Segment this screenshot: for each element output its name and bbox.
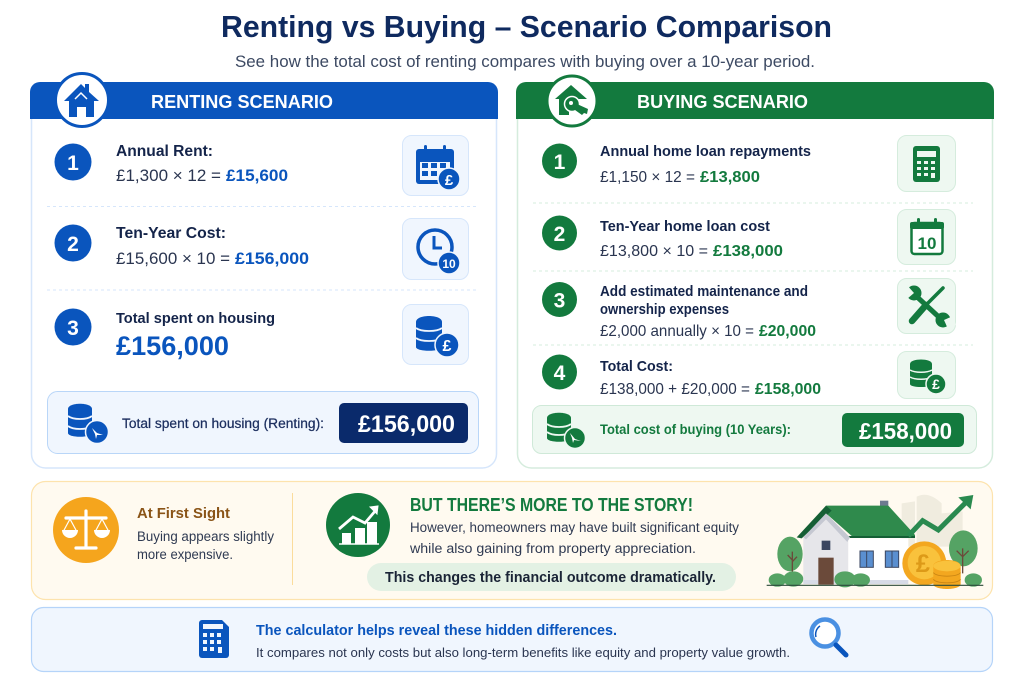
icon: coins with pound	[402, 304, 468, 364]
buying total value	[842, 413, 964, 447]
panel: buying scenario	[516, 76, 994, 468]
icon: clock with 10	[402, 218, 468, 280]
at first sight text: more expensive.	[137, 547, 233, 562]
divider	[533, 270, 973, 272]
renting step 2: £15,600 × 10 =	[116, 249, 230, 268]
renting step 1: £15,600	[226, 166, 288, 185]
calculator note text: The calculator helps reveal these hidden differences.	[256, 622, 617, 639]
renting step 3: £156,000	[116, 331, 229, 361]
icon: growth chart	[326, 493, 390, 557]
renting step 2	[54, 224, 309, 268]
buying card background	[518, 85, 992, 468]
buying step 1: Annual home loan repayments	[600, 143, 811, 160]
subtitle: See how the total cost of renting compares with buying over a 10-year period.	[235, 53, 815, 71]
renting step 2: 2	[67, 233, 79, 256]
renting step 2: Ten-Year Cost:	[116, 225, 226, 242]
buying step 2: £13,800 × 10 =	[600, 243, 708, 260]
renting step 1: Annual Rent:	[116, 143, 213, 160]
divider	[47, 289, 477, 291]
renting total value	[339, 403, 468, 443]
icon: calendar 10	[898, 210, 956, 264]
buying step 3: £2,000 annually × 10 =	[600, 323, 754, 340]
buying step 3	[542, 282, 816, 340]
illustration: house with coins and growth arrow	[767, 495, 983, 589]
buying step 4: £158,000	[755, 381, 821, 398]
at first sight text: At First Sight	[137, 505, 230, 522]
callout pill: This changes the financial outcome dramatically.	[385, 570, 716, 586]
icon: coins with pound: £	[932, 376, 940, 392]
renting step 1: £1,300 × 12 =	[116, 166, 221, 185]
buying step 3: Add estimated maintenance and	[600, 284, 808, 300]
icon: wrench and screwdriver	[898, 278, 956, 334]
icon: calendar 10: 10	[918, 234, 936, 253]
at first sight text	[137, 505, 274, 562]
calculator note background	[32, 608, 992, 672]
buying step 4: 4	[554, 362, 566, 385]
buying total value: £158,000	[859, 418, 952, 444]
renting step 3: Total spent on housing	[116, 310, 275, 327]
icon: calendar with pound: £	[445, 172, 454, 189]
buying step 4: £138,000 + £20,000 =	[600, 381, 750, 398]
buying step 1: £13,800	[700, 169, 760, 186]
more to the story text: However, homeowners may have built significant equity	[410, 520, 739, 535]
more to the story text: BUT THERE’S MORE TO THE STORY!	[410, 495, 693, 515]
icon: coins with hand	[547, 413, 586, 448]
buying step 2: 2	[554, 223, 565, 246]
buying header title: BUYING SCENARIO	[637, 92, 808, 112]
buying total label: Total cost of buying (10 Years):	[600, 422, 791, 437]
at first sight text: Buying appears slightly	[137, 529, 274, 544]
buying step 2: £138,000	[713, 243, 783, 260]
panel: renting scenario	[30, 74, 498, 468]
renting step 2: £156,000	[235, 249, 309, 268]
icon: calculator	[898, 136, 956, 192]
buying step 2: Ten-Year home loan cost	[600, 218, 770, 235]
buying step 3: 3	[554, 290, 565, 312]
buying header bar	[516, 82, 994, 119]
buying step 2	[542, 216, 783, 260]
buying total box	[532, 406, 976, 454]
panel: calculator note	[32, 608, 992, 672]
icon: calendar with pound	[402, 136, 468, 196]
icon: balance scales	[53, 497, 119, 563]
icon: coins with hand	[68, 404, 108, 444]
buying step 3: ownership expenses	[600, 302, 729, 318]
buying step 4: Total Cost:	[600, 358, 673, 375]
icon: coins with pound	[898, 352, 956, 398]
buying step 1: 1	[554, 151, 566, 174]
renting header bar	[30, 82, 498, 119]
renting header title: RENTING SCENARIO	[151, 92, 333, 112]
renting step 3	[54, 308, 275, 361]
renting header icon: house	[56, 74, 108, 126]
icon: magnifier	[812, 620, 846, 655]
insight background	[32, 482, 992, 600]
calculator note text: It compares not only costs but also long-term benefits like equity and property value growth.	[256, 645, 790, 660]
buying step 3: £20,000	[759, 323, 816, 340]
more to the story text: while also gaining from property appreciation.	[409, 541, 696, 556]
divider	[533, 202, 973, 204]
renting step 1: 1	[67, 152, 79, 175]
buying step 1: £1,150 × 12 =	[600, 169, 695, 186]
icon: coins with pound: £	[443, 338, 452, 355]
renting step 3: 3	[67, 317, 79, 340]
divider	[533, 344, 973, 346]
renting total label: Total spent on housing (Renting):	[122, 416, 324, 431]
icon: clock with 10: 10	[442, 257, 456, 271]
illustration: house with coins and growth arrow: £	[916, 550, 930, 578]
renting total box	[48, 392, 478, 454]
renting total value: £156,000	[358, 411, 455, 438]
buying header icon: house and key	[547, 76, 597, 126]
icon: calculator	[199, 620, 229, 658]
callout pill	[367, 563, 736, 591]
title: Renting vs Buying – Scenario Comparison	[221, 9, 832, 44]
calculator note text	[256, 622, 790, 660]
panel: insight	[32, 482, 992, 600]
divider	[47, 206, 477, 208]
buying step 1	[542, 143, 811, 186]
renting step 1	[54, 143, 288, 185]
renting card background	[32, 85, 496, 468]
more to the story text	[409, 495, 739, 556]
buying step 4	[542, 354, 821, 398]
